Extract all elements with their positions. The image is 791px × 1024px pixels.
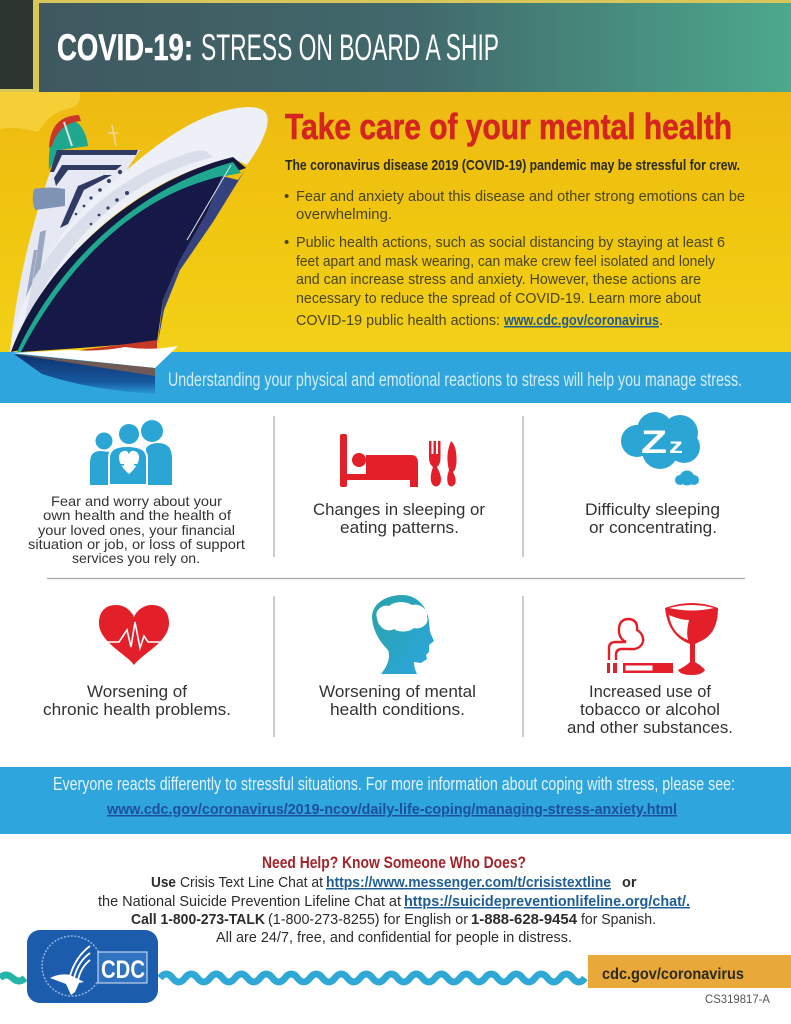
- text: substance use: [567, 682, 733, 737]
- bullet list: •: [284, 234, 289, 251]
- panel: difficulty sleeping: [585, 412, 720, 537]
- logo: CDC: CDC: [101, 956, 145, 984]
- bullet list: [284, 188, 745, 329]
- footer url box: cdc.gov/coronavirus: [602, 966, 744, 983]
- dividers: [47, 416, 745, 737]
- panel: blue understanding band: [0, 352, 791, 403]
- text: sleeping or eating: [313, 500, 485, 537]
- text: substance use: tobacco or alcohol: [580, 700, 720, 719]
- icon: cigarette and wine glass: [607, 603, 718, 675]
- text: mental health: health conditions.: [330, 700, 465, 719]
- text: difficulty sleeping: Difficulty sleeping: [585, 500, 720, 519]
- text: substance use: and other substances.: [567, 718, 733, 737]
- text: sleeping or eating: eating patterns.: [340, 518, 459, 537]
- help contact text: https://www.messenger.com/t/crisistextline: [326, 875, 611, 891]
- illustration: cruise ship: [10, 107, 268, 394]
- bullet list: and can increase stress and anxiety. However, these actions are: [296, 271, 701, 288]
- bullet list: COVID-19 public health actions:: [296, 312, 500, 329]
- header banner: [0, 0, 791, 92]
- document code: CS319817-A: [705, 994, 770, 1006]
- wave decoration: [0, 974, 585, 982]
- text: chronic problems: chronic health problems.: [43, 700, 231, 719]
- text: sleeping or eating: Changes in sleeping or: [313, 500, 485, 519]
- text: fear and worry: situation or job, or loss of support: [28, 536, 245, 552]
- icon: heart with pulse: [99, 605, 169, 665]
- panel: substance use: [567, 603, 733, 737]
- logo: CDC: [27, 930, 158, 1003]
- text: fear and worry: your loved ones, your financial: [38, 522, 235, 538]
- icon: family: [90, 420, 172, 485]
- help contact text: All are 24/7, free, and confidential for people in distress.: [216, 930, 572, 946]
- help contact text: (1-800-273-8255) for English or: [268, 912, 468, 928]
- text: difficulty sleeping: [585, 500, 720, 537]
- text: fear and worry: own health and the health of: [43, 507, 231, 523]
- text: chronic problems: [43, 682, 231, 719]
- text: substance use: Increased use of: [589, 682, 711, 701]
- text: mental health: [319, 682, 476, 719]
- footer url box: [588, 955, 791, 988]
- panel: yellow intro background: [0, 92, 791, 354]
- bullet list: necessary to reduce the spread of COVID-19. Learn more about: [296, 290, 702, 307]
- title: COVID-19:: [57, 27, 193, 68]
- bullet list: www.cdc.gov/coronavirus: [503, 312, 659, 329]
- icon: sleep cloud: Z: [641, 424, 667, 460]
- panel: coping information band: [0, 767, 791, 834]
- bullet list: Fear and anxiety about this disease and other strong emotions can be: [296, 188, 745, 205]
- help contact text: or: [622, 875, 637, 891]
- title: [57, 27, 499, 68]
- icon: sleep cloud: [621, 412, 700, 486]
- icon: bed and cutlery: [340, 434, 457, 487]
- help contact text: Call 1-800-273-TALK: [131, 912, 266, 928]
- help contact text: Use: [151, 875, 176, 891]
- bullet list: .: [659, 312, 663, 329]
- title: STRESS ON BOARD A SHIP: [201, 27, 499, 68]
- bullet list: •: [284, 188, 289, 205]
- text: chronic problems: Worsening of: [87, 682, 187, 701]
- help contact text: [98, 875, 690, 946]
- icon: sleep cloud: z: [669, 435, 683, 458]
- bullet list: feet apart and mask wearing, can make crew feel isolated and lonely: [296, 253, 715, 270]
- heading: need help: Need Help? Know Someone Who Does?: [262, 853, 526, 872]
- bullet list: Public health actions, such as social distancing by staying at least 6: [296, 234, 725, 251]
- text: mental health: Worsening of mental: [319, 682, 476, 701]
- text: difficulty sleeping: or concentrating.: [589, 518, 717, 537]
- help contact text: Crisis Text Line Chat at: [180, 875, 323, 891]
- panel: chronic problems: [43, 605, 231, 719]
- bullet list: overwhelming.: [296, 206, 392, 223]
- text: fear and worry: Fear and worry about your: [51, 493, 222, 509]
- help contact text: for Spanish.: [581, 912, 656, 928]
- text: fear and worry: [28, 493, 245, 566]
- coping link: www.cdc.gov/coronavirus/2019-ncov/daily-life-coping/managing-stress-anxiety.html: [106, 801, 677, 818]
- help contact text: https://suicidepreventionlifeline.org/chat/.: [404, 894, 690, 910]
- text: fear and worry: services you rely on.: [72, 550, 200, 566]
- icon: head with cloud: [372, 595, 434, 674]
- help contact text: 1-888-628-9454: [471, 912, 577, 928]
- panel: sleeping or eating: [313, 434, 485, 537]
- help contact text: the National Suicide Prevention Lifeline Chat at: [98, 894, 401, 910]
- panel: fear and worry: [28, 420, 245, 566]
- panel: mental health: [319, 595, 476, 719]
